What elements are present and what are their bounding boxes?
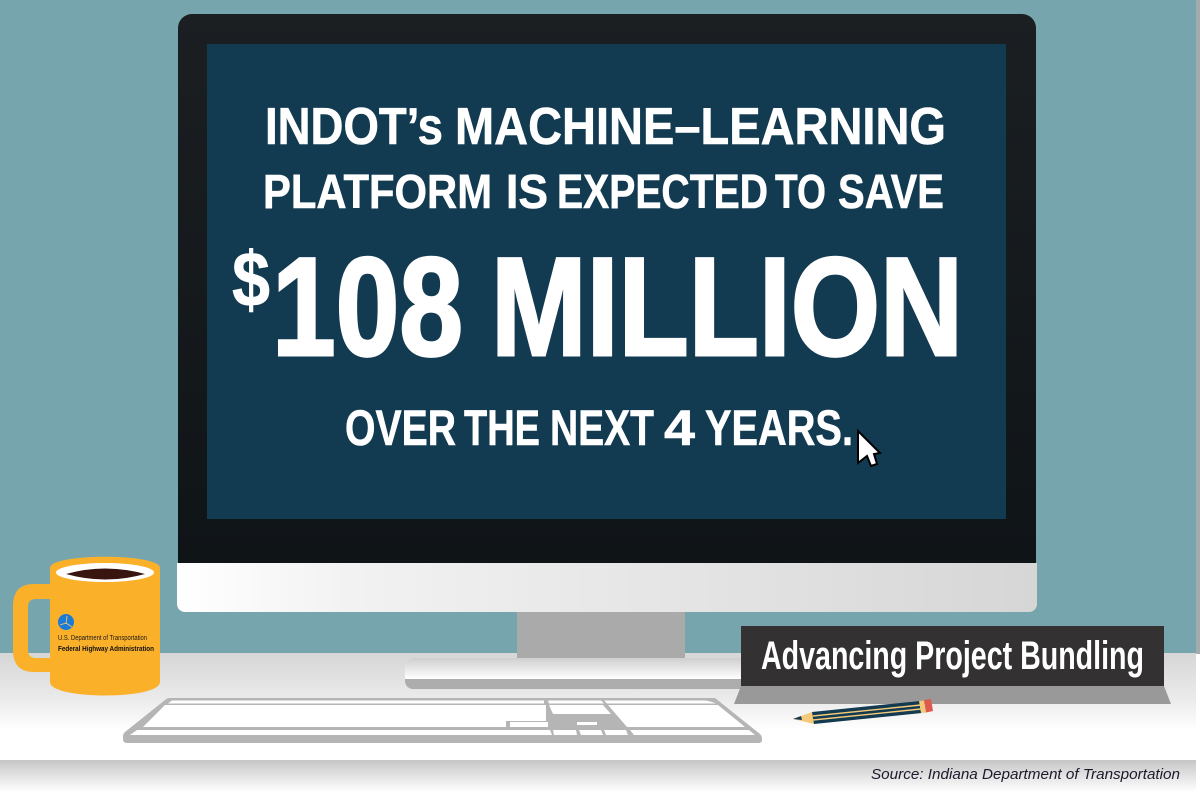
headline: $108 million: $ [232,235,270,323]
coffee [66,568,145,580]
monitor [177,14,1037,612]
headline line 2 [263,166,944,219]
headline line 2: TO [775,166,826,219]
headline: $108 million [232,228,963,385]
headline line 1: INDOT’s [265,98,443,156]
monitor stand [405,612,750,689]
headline line 2: IS [506,166,548,219]
mug handle [13,584,52,672]
headline line 2: SAVE [838,166,944,219]
mug [13,557,160,696]
headline line 2: PLATFORM [263,166,492,219]
headline line 4 [345,400,853,456]
headline line 4: NEXT [550,400,654,456]
headline line 1 [265,98,946,156]
headline line 4: OVER [345,400,456,456]
source note: Source: Indiana Department of Transportation [871,766,1180,783]
monitor bezel [178,14,1036,563]
keyboard keys [130,700,755,735]
mug text: administration: Federal Highway Administration [58,644,154,653]
mug text: department: U.S. Department of Transportation [58,635,147,642]
headline line 2: EXPECTED [557,166,768,219]
headline: $108 million: MILLION [491,228,963,385]
icon: department logo [58,614,74,630]
icon: pencil [793,699,933,724]
mug body [50,557,160,696]
title plate [741,626,1164,686]
keyboard frame [123,698,762,743]
monitor screen [207,44,1006,519]
keyboard [123,698,762,743]
headline line 1: MACHINE–LEARNING [455,98,946,156]
mug opening [56,563,154,582]
headline line 4: YEARS. [705,400,853,456]
nameplate stand [734,686,1171,704]
headline line 4: 4 [664,400,695,456]
headline line 4: THE [464,400,540,456]
icon: mouse cursor [858,431,880,466]
headline: $108 million: 108 [272,228,463,385]
monitor chin [177,563,1037,612]
